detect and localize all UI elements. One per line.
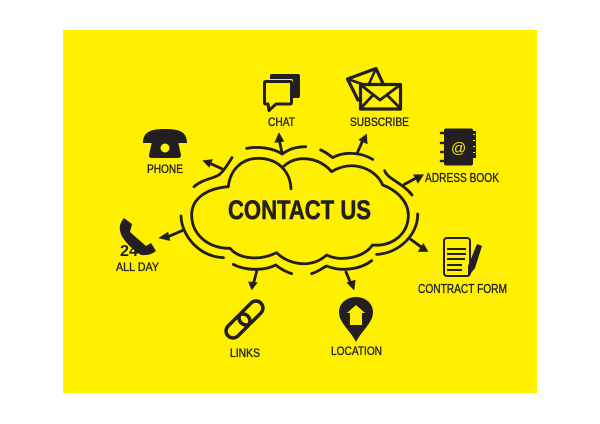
icon: location pin with house (339, 297, 373, 342)
label: contract form: CONTRACT FORM (418, 282, 507, 296)
label: subscribe: SUBSCRIBE (350, 115, 409, 129)
label: phone: PHONE (147, 162, 183, 176)
icon: envelopes (348, 68, 400, 109)
label: all day: ALL DAY (116, 260, 159, 274)
icon: telephone (143, 129, 187, 158)
icon: chat bubbles (264, 74, 300, 110)
label: at sign: @ (451, 140, 466, 157)
icon: 24 hour handset (120, 218, 156, 260)
icon: address book (441, 128, 476, 166)
icon: contract form and pen (444, 238, 482, 277)
arrows radiating from cloud (159, 133, 428, 290)
label: 24: 24 (120, 243, 138, 260)
icon: chain links (223, 298, 266, 341)
yellow background panel (63, 30, 537, 393)
label: address book: ADRESS BOOK (425, 171, 500, 185)
title: CONTACT US (228, 195, 371, 225)
label: location: LOCATION (331, 344, 382, 358)
label: chat: CHAT (268, 115, 296, 129)
central cloud diagram (159, 133, 428, 290)
cloud outline (192, 158, 408, 264)
label: links: LINKS (230, 346, 260, 360)
outer arcs around cloud (181, 147, 418, 274)
